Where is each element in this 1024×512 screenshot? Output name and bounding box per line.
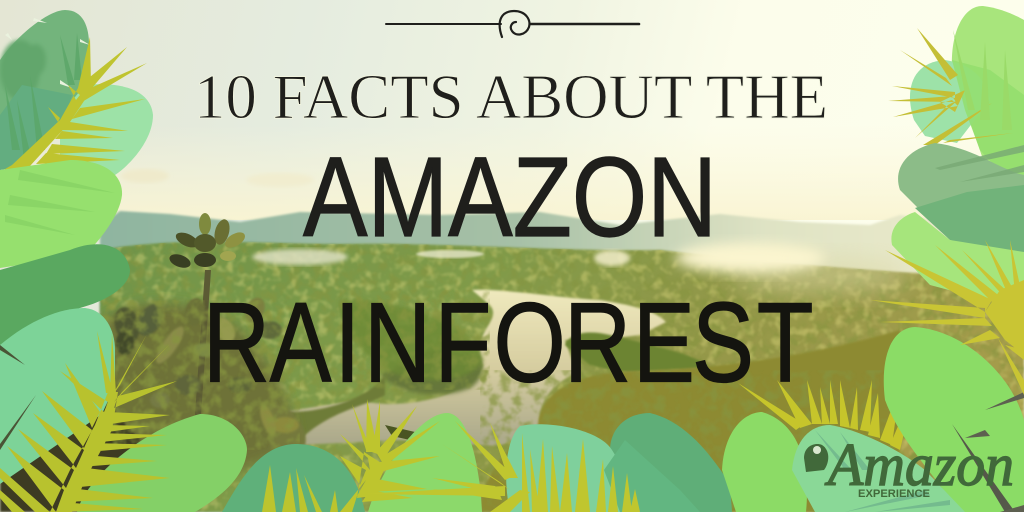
logo: Amazon Experience [804, 432, 1014, 500]
leaf: bottom green [222, 444, 365, 512]
leaf: bottom right lime [722, 412, 807, 512]
leaf: top right lime [952, 6, 1024, 175]
lime spikes on left leaf [5, 170, 115, 235]
leaf: right lime lower [891, 212, 1024, 310]
green spikes on top right leaf [953, 30, 1012, 130]
title line: Rainforest: RAINFOREST [203, 279, 813, 406]
logo head [804, 444, 828, 472]
palm frond: centre right [362, 421, 640, 512]
bush foliage [111, 294, 299, 437]
logo subtitle: EXPERIENCE [858, 488, 930, 500]
leaf: right darker overlap [915, 185, 1024, 258]
leaf: top right mint [910, 60, 990, 143]
foliage texture over bush and near forest [100, 290, 920, 512]
foliage seen through top left leaf [0, 40, 46, 100]
leaf: bottom left lime [77, 414, 247, 512]
overlap of the two top left leaves [0, 85, 72, 170]
palm frond: top right [888, 28, 1013, 145]
leaf: top left mint [60, 84, 153, 175]
leaf: left mint [0, 308, 115, 484]
top ornament: line with swirl [386, 11, 639, 37]
leaf: left dark green [0, 244, 130, 345]
dark spine across right leaf [952, 424, 1015, 512]
leaf: top right lime overlap [952, 60, 1024, 182]
palm frond: behind bottom right leaves [738, 380, 915, 450]
white slits on top left leaf [5, 18, 90, 88]
title line: Amazon: AMAZON [303, 134, 717, 260]
dark spikes on right leaf [965, 392, 1024, 512]
leaf: bottom mint centre [506, 424, 650, 512]
leaf: top left dark green [0, 10, 89, 170]
leaf: bottom green overlap [604, 440, 700, 512]
dark thorns on left leaves [0, 345, 36, 450]
leaf: bottom lime centre [368, 413, 482, 512]
leaf: right lower big lime [884, 327, 1024, 512]
translucent veins on logo leaf [815, 430, 950, 512]
title line: 10 facts about the: 10 FACTS ABOUT THE [194, 61, 828, 132]
leaf: bottom dark green back leaf [610, 413, 732, 512]
palm frond: centre [340, 399, 440, 512]
tree crown [168, 213, 248, 270]
palm frond: top left [0, 37, 147, 197]
veins on right dark leaf [935, 145, 1024, 182]
leaf: left lime [0, 160, 122, 268]
green translucent spikes on top left leaf [5, 33, 82, 160]
palm frond: far bottom left of centre [262, 465, 338, 512]
palm frond: right [870, 240, 1024, 395]
logo wordmark: Amazon [824, 432, 1014, 498]
leaf: right dark green [898, 143, 1024, 260]
palm frond: bottom left [0, 331, 177, 512]
leaf: logo mint leaf [792, 425, 965, 512]
